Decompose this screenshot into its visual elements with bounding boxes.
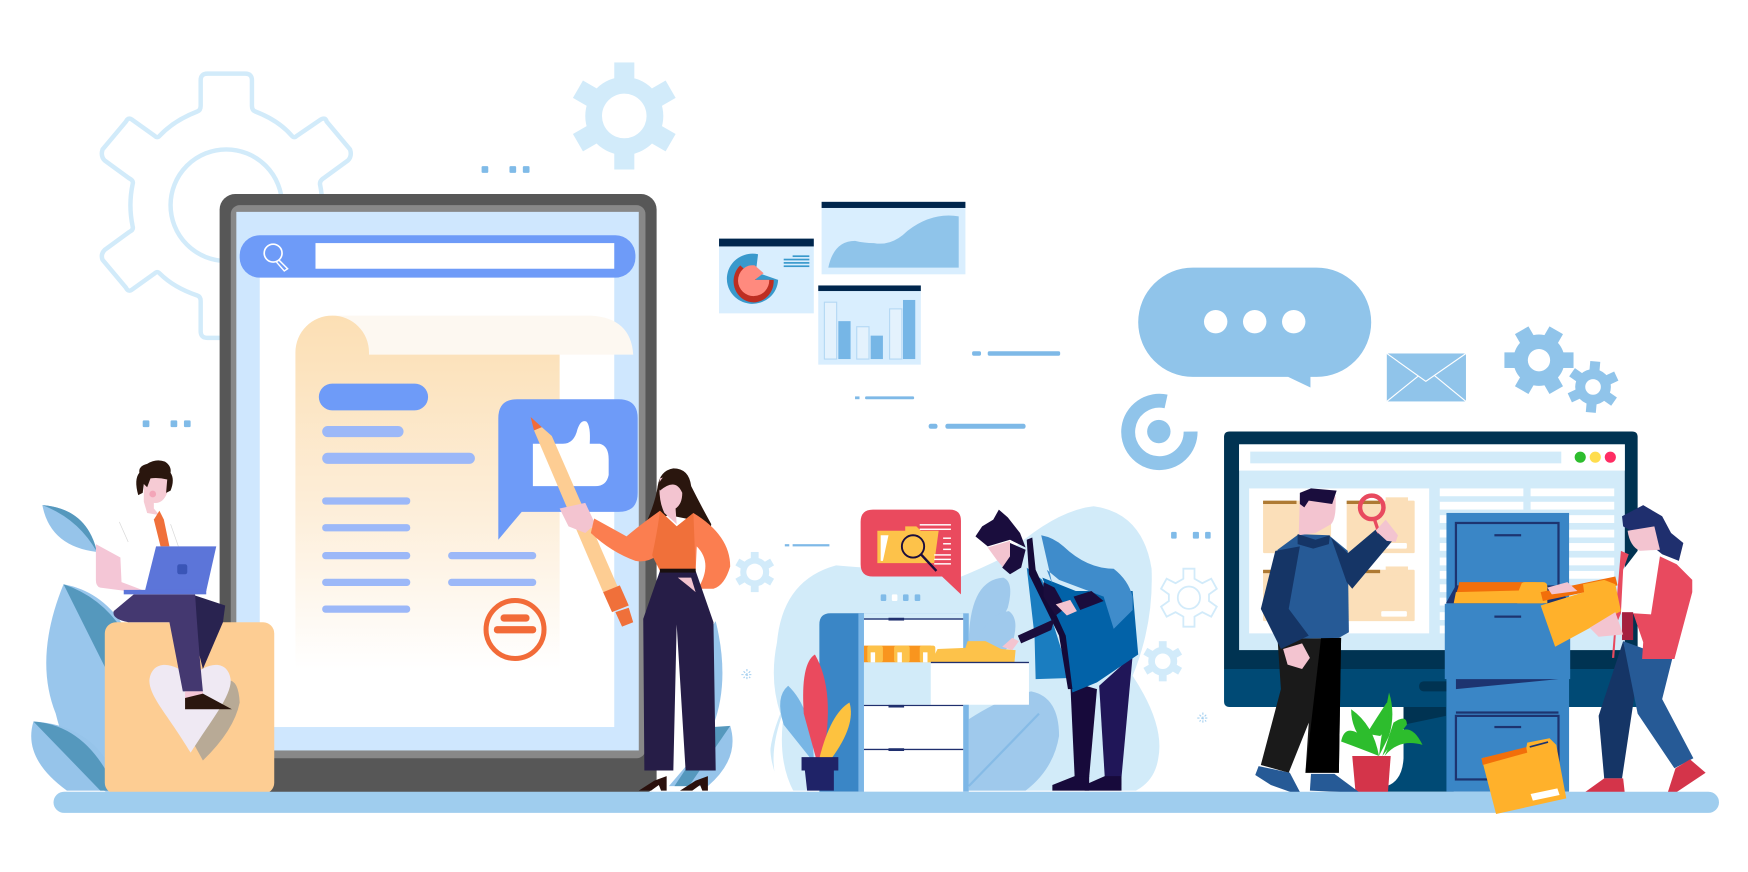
main jacket [1042, 578, 1138, 692]
pencil [531, 417, 633, 627]
phone hand [1056, 600, 1077, 616]
leaves behind woman [669, 621, 733, 786]
pot [802, 757, 838, 791]
bar chart card [818, 285, 921, 365]
red search bubble [861, 510, 961, 594]
pink arm [96, 544, 145, 593]
fallen folder [1482, 738, 1566, 814]
folder back [1541, 577, 1618, 601]
top hand [1547, 582, 1577, 594]
beard [1002, 543, 1026, 574]
open drawer shaded part [864, 662, 931, 705]
person: man with magnifier [1255, 488, 1398, 796]
floating dash lines [785, 351, 1060, 546]
tablet device [220, 194, 657, 794]
right heel [680, 776, 708, 791]
gear beside woman [735, 552, 774, 592]
icon: target ring [1128, 401, 1191, 463]
purple leg [113, 594, 203, 691]
cheek [149, 491, 156, 497]
page area [260, 256, 614, 727]
solid gear center [1143, 641, 1182, 681]
right shoe [1666, 759, 1706, 800]
computer monitor [1224, 432, 1638, 792]
charts cards [719, 202, 965, 365]
black trouser shade [1305, 638, 1341, 773]
speech bubble with dots [1138, 268, 1371, 387]
person: bending man [975, 510, 1138, 791]
pink hand [560, 503, 595, 533]
raised hand [1376, 520, 1398, 542]
icon: large outlined gear [102, 74, 351, 338]
hair [975, 510, 1026, 548]
lower divider [1456, 711, 1558, 714]
forearm [1074, 591, 1104, 610]
dark front edge [1027, 537, 1072, 689]
decorative dots top [482, 166, 530, 173]
held folder [1541, 580, 1621, 647]
left leg [1599, 641, 1635, 778]
shirt folds [119, 522, 178, 546]
thumbs up speech bubble [498, 399, 638, 540]
leaves behind man [969, 578, 1059, 791]
blouse shading [652, 511, 696, 571]
tablet inner bezel [231, 205, 645, 758]
icon: big blue gear [1504, 326, 1574, 394]
jacket drape [1041, 535, 1133, 629]
small dots above cabinet [881, 594, 920, 601]
dark drawer cavity [1446, 585, 1570, 603]
red pot [1352, 756, 1391, 793]
left heel [639, 776, 667, 791]
orange blouse [591, 511, 730, 589]
browser bar [1239, 444, 1625, 471]
hand on hip [678, 578, 696, 592]
jacket lapel [1612, 551, 1629, 658]
leaves [1341, 692, 1422, 756]
magnifier [902, 535, 936, 571]
person: man with laptop [96, 460, 232, 709]
face [659, 477, 682, 524]
potted plant left [780, 655, 851, 791]
left shoe [1255, 766, 1302, 796]
long hair [647, 468, 711, 533]
monitor chin [1224, 669, 1638, 707]
folder icon [877, 526, 939, 563]
neck and face [144, 476, 167, 515]
icon: envelope [1387, 353, 1466, 401]
folders in cabinet [1454, 582, 1547, 603]
face and neck [1628, 526, 1660, 551]
orange cushion box [105, 622, 274, 794]
white shirt [1621, 551, 1660, 614]
right leg [1623, 641, 1693, 768]
sparks [741, 531, 1208, 754]
decorative dots center right [1171, 532, 1211, 539]
open drawer front [1445, 604, 1570, 679]
lower hand [1283, 643, 1310, 669]
scroll paper [295, 316, 633, 669]
screen [1239, 444, 1625, 650]
top drawer recess [1456, 523, 1558, 592]
pink sock [185, 691, 203, 700]
hair [1622, 505, 1683, 561]
ground strip [54, 792, 1719, 813]
icon: solid gear top [573, 62, 676, 169]
person: woman with pencil [560, 468, 730, 791]
bottom drawer [1456, 716, 1558, 779]
pants left [1070, 681, 1097, 777]
folder hand [1590, 612, 1623, 637]
heart shape [149, 665, 231, 753]
potted plant right [1341, 692, 1422, 793]
hair fringe [658, 473, 682, 493]
raised sleeve [1331, 530, 1392, 589]
red accent [1622, 612, 1633, 640]
left plant leaves [31, 505, 123, 792]
magnifier [1360, 496, 1383, 533]
table rows [1440, 488, 1614, 633]
area chart card [822, 202, 965, 274]
jacket [1278, 534, 1349, 639]
filing cabinet left [819, 613, 1029, 792]
shoe [185, 694, 232, 709]
folders panel [1249, 488, 1429, 633]
hair [1300, 488, 1337, 507]
document lines [319, 384, 536, 613]
chin pill [1419, 681, 1453, 691]
search bar [240, 235, 635, 278]
waist belt [660, 569, 696, 573]
orange tie [154, 511, 169, 546]
collar [1298, 534, 1330, 549]
shirt [111, 502, 201, 591]
laptop [124, 546, 216, 594]
list lines [920, 524, 951, 565]
light jacket back [1027, 568, 1070, 679]
cabinet side [819, 613, 864, 792]
pants [643, 571, 716, 771]
pants right [1099, 656, 1133, 777]
icon: orange circle with bars [486, 600, 544, 658]
pie chart card [719, 239, 814, 313]
hair [136, 460, 173, 495]
red jacket [1633, 556, 1692, 659]
small gears and sparks [735, 531, 1217, 754]
icon: small blue gear [1568, 361, 1618, 413]
pants [1261, 638, 1341, 773]
left shoe [1576, 778, 1625, 798]
open drawer front [931, 662, 1029, 705]
outlined gear center [1161, 569, 1217, 627]
tablet screen [236, 212, 639, 750]
shoes [1052, 776, 1089, 791]
drawer shadow [1456, 679, 1558, 689]
background blob center [764, 506, 1159, 792]
monitor stand [1387, 703, 1454, 792]
heart shadow [167, 678, 240, 760]
drawer separators [864, 618, 963, 751]
monitor frame [1224, 432, 1638, 669]
tablet outer frame [220, 194, 657, 794]
cabinet body [1446, 513, 1569, 792]
reaching arm [1018, 619, 1055, 643]
neck and face [1299, 496, 1336, 535]
cabinet front [858, 613, 969, 792]
filing cabinet right [1445, 513, 1570, 792]
face [988, 541, 1010, 568]
folders in drawer [864, 641, 1016, 662]
reaching hand [1002, 638, 1019, 650]
phone [1043, 582, 1066, 616]
decorative dots left [143, 420, 191, 427]
left sleeve [1261, 546, 1309, 649]
person: woman with folder [1541, 505, 1706, 800]
dark leg [192, 595, 225, 669]
right shoe [1310, 774, 1360, 793]
